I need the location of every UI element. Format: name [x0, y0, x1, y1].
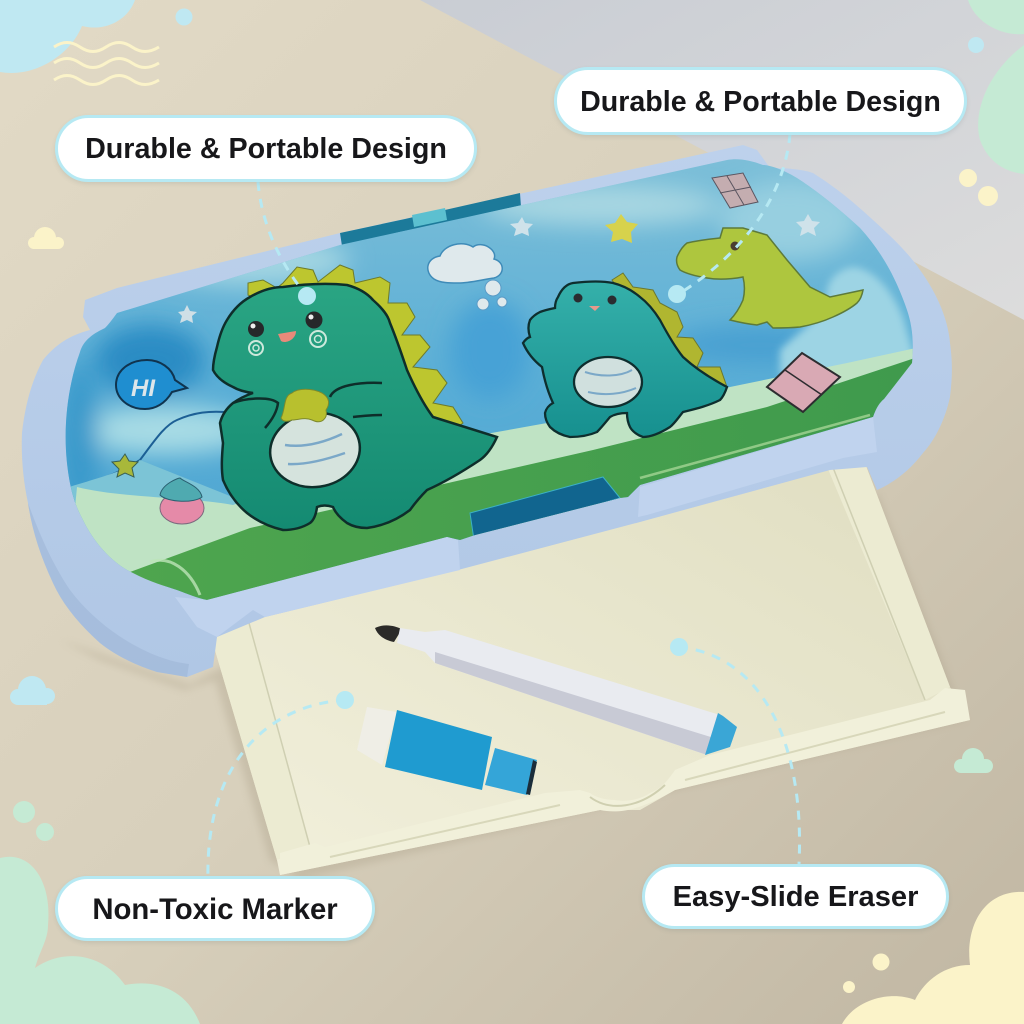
- pale hill right: [780, 267, 920, 375]
- marker: [375, 625, 737, 755]
- hi bubble: [116, 360, 187, 409]
- cloud bubbles: [477, 280, 507, 310]
- chocolate icons: [712, 173, 840, 412]
- label: Durable & Portable Design right: [554, 67, 967, 135]
- green ground: [130, 353, 930, 610]
- pale ground band: [70, 345, 930, 590]
- label: Durable & Portable Design left: [55, 115, 477, 182]
- illustrated panel: [66, 159, 913, 600]
- middle dino: [523, 273, 727, 437]
- soft shadow under case and tray: [60, 495, 965, 880]
- clasp top: [340, 193, 521, 246]
- slider window: [470, 477, 620, 540]
- stars: [112, 454, 138, 477]
- eraser: [357, 707, 537, 795]
- label: Durable & Portable Design right: Durable & Portable Design: [580, 86, 941, 118]
- big dino: [213, 265, 497, 530]
- lower right clip: [638, 417, 877, 517]
- leader dots: [298, 285, 688, 709]
- label: Easy-Slide Eraser: Easy-Slide Eraser: [673, 881, 918, 913]
- label: Non-Toxic Marker: Non-Toxic Marker: [92, 892, 338, 926]
- case shell: [22, 145, 952, 677]
- label: Easy-Slide Eraser: [642, 864, 949, 929]
- cloud: [428, 244, 502, 283]
- label: Non-Toxic Marker: [55, 876, 375, 941]
- whiteboard tray: [212, 440, 970, 875]
- small yellow dino: [677, 228, 863, 328]
- dashed leader lines: [208, 134, 800, 880]
- hi bubble: HI: [131, 375, 156, 402]
- label: Durable & Portable Design left: Durable & Portable Design: [85, 133, 447, 165]
- strawberry: [160, 478, 204, 524]
- pencil case: [22, 140, 952, 677]
- lower left clip: [175, 537, 460, 637]
